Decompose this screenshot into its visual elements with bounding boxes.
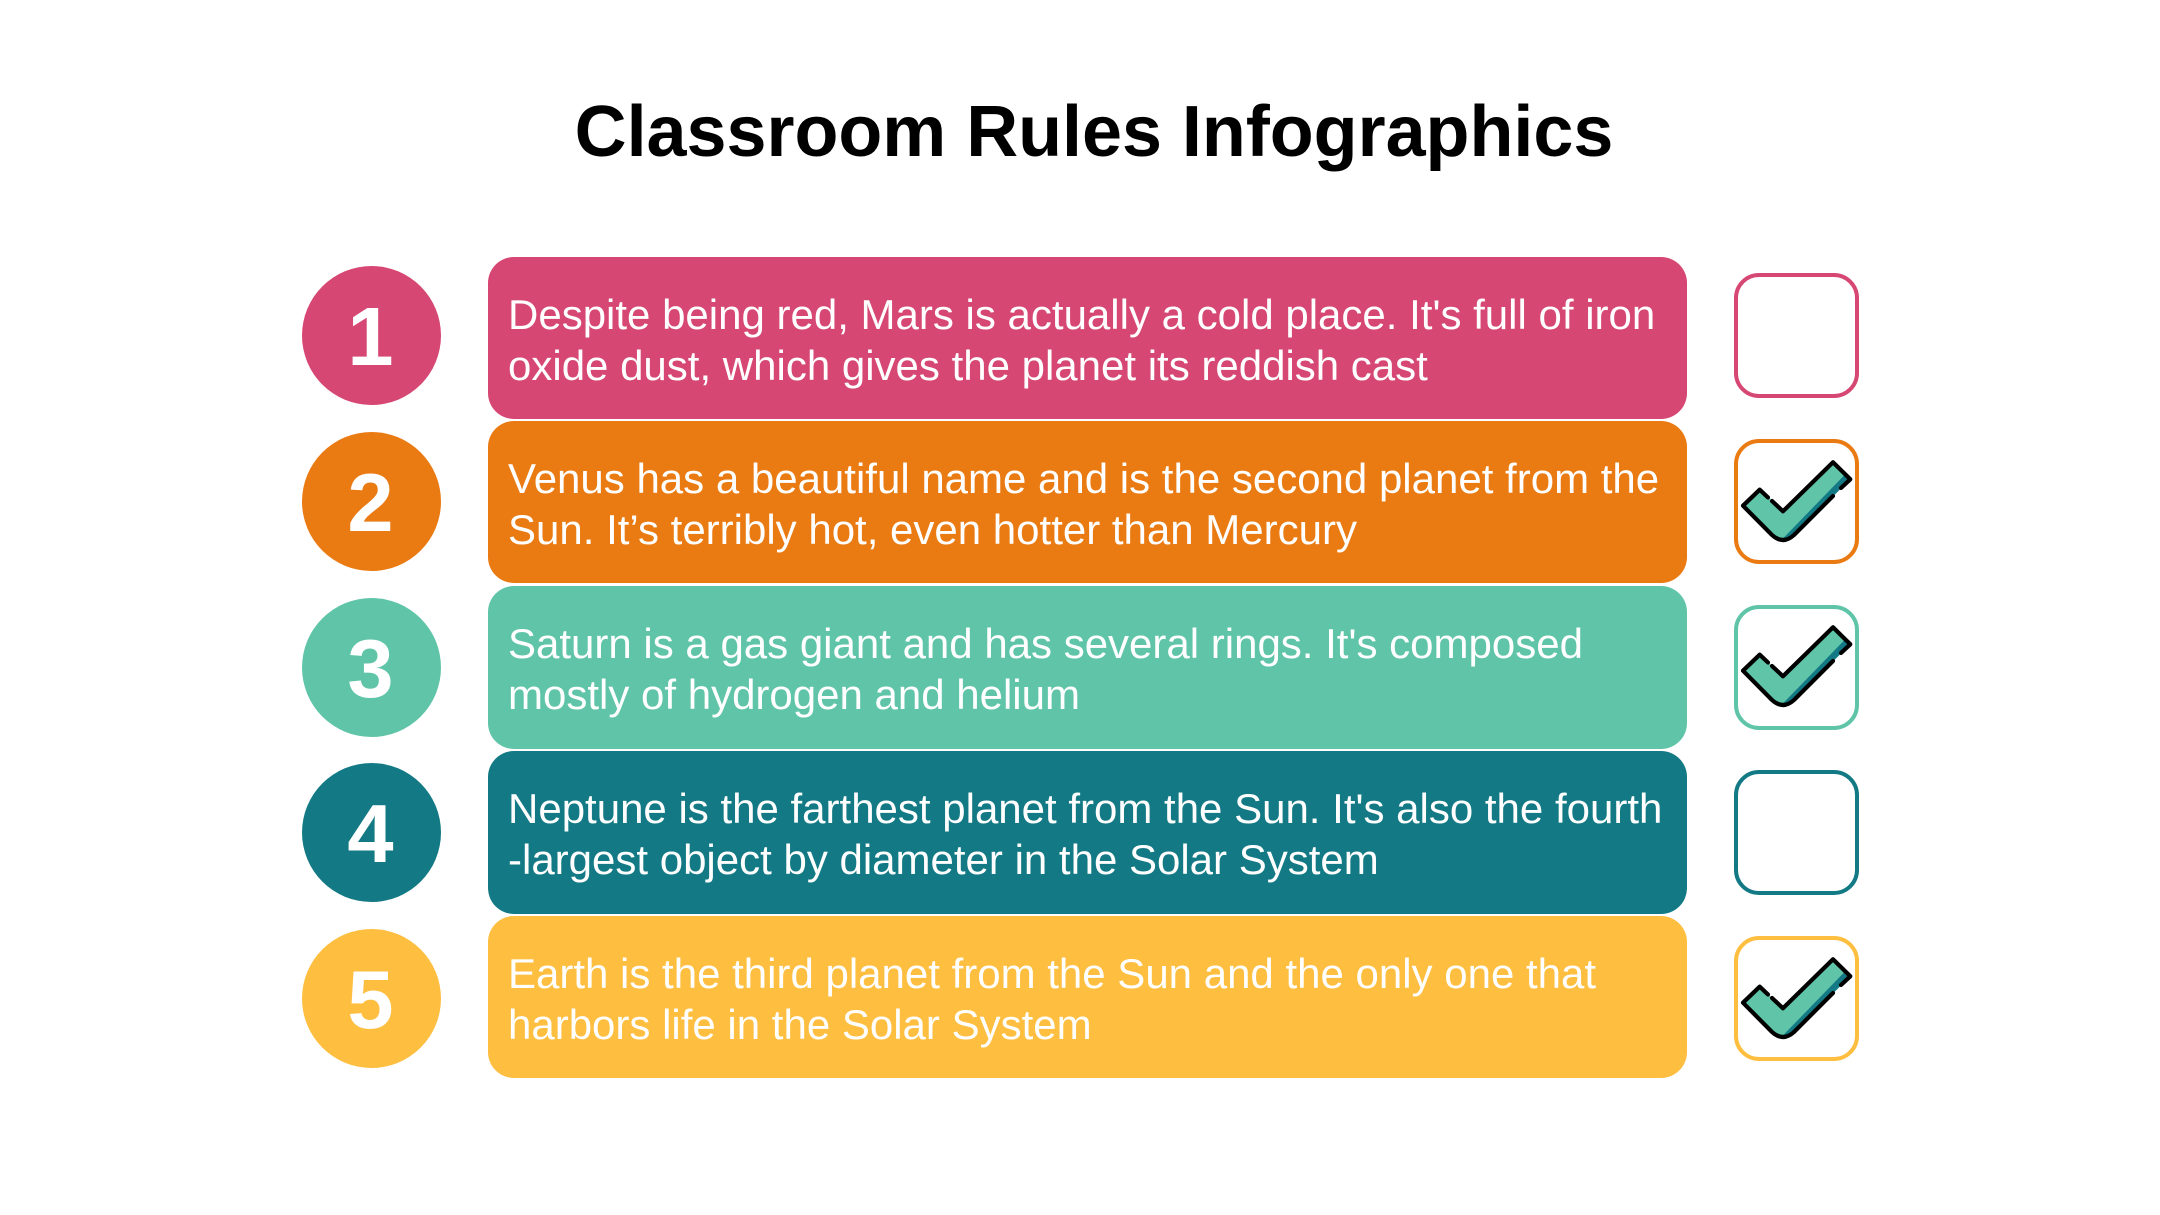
rule 3 number badge: 3 (347, 622, 394, 714)
rule 5 text panel: harbors life in the Solar System (508, 1001, 1092, 1048)
rule 4 number badge (302, 763, 441, 902)
rule 2 checked checkbox (1734, 439, 1859, 564)
rule 1 text panel: Despite being red, Mars is actually a cold place. It's full of iron (508, 291, 1655, 338)
rule 1 number badge: 1 (347, 290, 394, 383)
rule 5 text panel: Earth is the third planet from the Sun and the only one that (508, 950, 1596, 997)
rule 5 text panel (488, 916, 1687, 1078)
rule 4 text panel: -largest object by diameter in the Solar System (508, 836, 1379, 883)
rule 3 text panel: Saturn is a gas giant and has several rings. It's composed (508, 620, 1583, 667)
title: Classroom Rules Infographics (575, 92, 1613, 172)
rule 3 text panel (488, 586, 1687, 749)
rule 2 number badge (302, 432, 441, 571)
rule 3 number badge (302, 598, 441, 736)
rule 2 text panel: Sun. It’s terribly hot, even hotter than Mercury (508, 506, 1357, 553)
rule 2 number badge: 2 (347, 456, 394, 549)
rule 4 text panel: Neptune is the farthest planet from the Sun. It's also the fourth (508, 785, 1662, 832)
rule 1 empty checkbox (1734, 273, 1859, 398)
rule 4 text panel (488, 751, 1687, 914)
rule 2 text panel (488, 421, 1687, 583)
rule 1 text panel (488, 257, 1687, 419)
rule 1 number badge (302, 266, 441, 405)
rule 5 number badge (302, 929, 441, 1068)
rule 5 checked checkbox (1734, 936, 1859, 1061)
rule 3 text panel: mostly of hydrogen and helium (508, 671, 1080, 718)
rule 1 text panel: oxide dust, which gives the planet its reddish cast (508, 342, 1428, 389)
rule 3 checked checkbox (1734, 604, 1859, 730)
rule 2 text panel: Venus has a beautiful name and is the second planet from the (508, 455, 1659, 502)
rule 5 number badge: 5 (347, 953, 394, 1046)
rule 4 empty checkbox (1734, 770, 1859, 895)
rule 4 number badge: 4 (347, 787, 394, 880)
